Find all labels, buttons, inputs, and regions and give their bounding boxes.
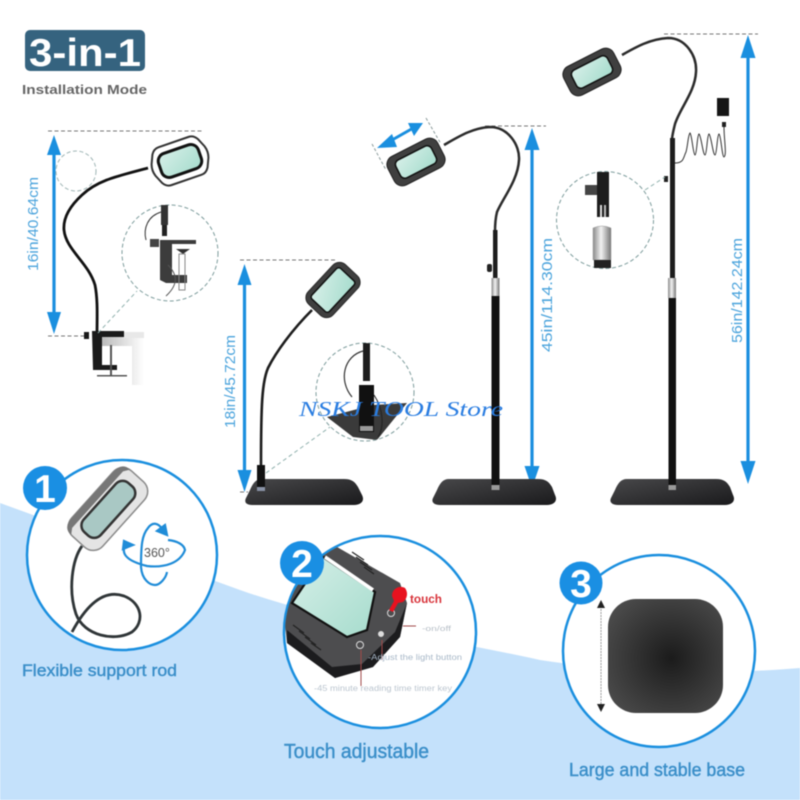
dashed empty circle [56, 151, 96, 191]
background wave [0, 503, 800, 800]
dimension guide [485, 125, 546, 127]
icon: 360 rotation [123, 524, 185, 585]
detail circle: joint [556, 172, 654, 268]
coiled gooseneck [72, 546, 140, 637]
panel 1: flexible support rod [22, 460, 217, 680]
square base [608, 599, 723, 713]
enlarged lamp head [283, 547, 407, 678]
callout leaders [361, 626, 416, 686]
panel 2: touch adjustable [280, 536, 476, 763]
dimension guides [48, 131, 203, 336]
gooseneck [64, 168, 148, 334]
caption: Flexible support rod [22, 661, 177, 680]
dimension guides [240, 260, 335, 492]
telescopic pole [664, 138, 676, 490]
zoom line [98, 291, 137, 333]
caption: Large and stable base [569, 760, 745, 780]
table corner [102, 332, 144, 385]
lamp head [560, 45, 624, 99]
badge 2: 2 [291, 543, 313, 586]
power adapter [717, 98, 729, 127]
base [245, 479, 363, 505]
icon: red hand [389, 587, 407, 612]
gooseneck [261, 310, 312, 465]
dimension guide [664, 33, 758, 35]
height label 18in: 18in/45.72cm [222, 335, 239, 428]
gooseneck [622, 38, 696, 140]
title badge: 3-in-1: 3-in-1 [29, 32, 141, 75]
badge 1: 1 [34, 468, 56, 511]
badge 1 [23, 466, 67, 511]
height arrow 56in [740, 35, 756, 484]
circle frame [284, 536, 476, 728]
lamp head [384, 135, 448, 189]
height label 45in: 45in/114.30cm [539, 238, 556, 352]
label: adjust the light: -Adjust the light button [368, 653, 462, 662]
badge 2 [280, 541, 324, 586]
label: timer: -45 minute reading time timer key [314, 684, 452, 693]
badge 3 [560, 562, 602, 606]
subtitle: Installation Mode: Installation Mode [22, 82, 147, 97]
stem [257, 465, 265, 491]
zoom line [266, 427, 330, 473]
width arrow [372, 118, 441, 170]
lamp head [302, 259, 364, 321]
gooseneck [444, 127, 519, 232]
lamp head [146, 133, 214, 189]
height arrow 45in [524, 128, 540, 488]
clamp mount lamp [25, 131, 218, 385]
floor lamp tall [556, 34, 758, 505]
detail circle: base socket [316, 343, 414, 441]
icon: 360 rotation: 360° [144, 546, 170, 560]
label: on/off: -on/off [422, 624, 452, 633]
floor lamp medium [372, 118, 556, 505]
clamp [84, 331, 127, 376]
telescopic pole [487, 230, 500, 490]
circle frame [563, 555, 755, 747]
watermark: NSKJ TOOL Store [298, 397, 503, 421]
circle frame [27, 460, 217, 650]
detail circle: clamp [122, 205, 218, 301]
coiled cable [675, 127, 725, 163]
base [610, 479, 734, 505]
height arrow 18in [238, 264, 252, 492]
desk stand lamp [222, 259, 414, 505]
badge 3: 3 [570, 563, 592, 606]
base [432, 479, 556, 505]
size marker [597, 600, 605, 712]
touch buttons [356, 610, 394, 648]
height arrow 16in [47, 135, 61, 334]
zoom line [645, 177, 665, 190]
height label 56in: 56in/142.24cm [729, 238, 746, 343]
lamp head tilted [63, 462, 153, 556]
height label 16in: 16in/40.64cm [25, 177, 42, 271]
panel 3: large and stable base [560, 555, 755, 780]
label: touch: touch [410, 592, 442, 606]
caption: Touch adjustable [284, 741, 429, 763]
